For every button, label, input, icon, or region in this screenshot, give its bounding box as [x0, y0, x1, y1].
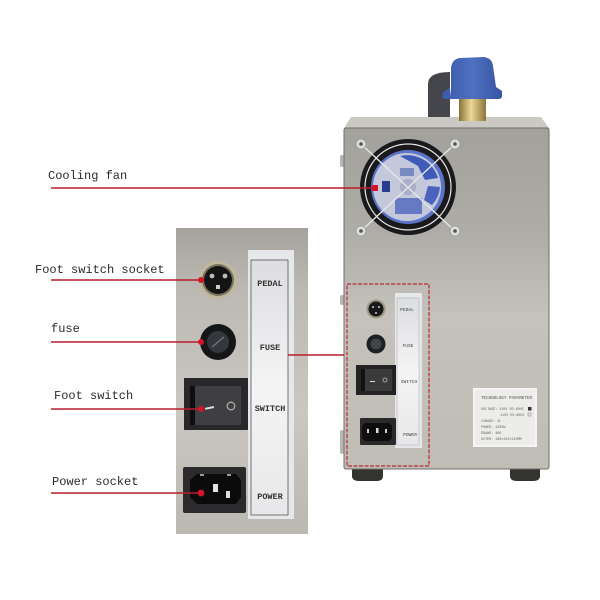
small connector strip: SWITCH — [401, 379, 418, 385]
machine: rear view — [340, 57, 549, 481]
label: foot switch socket: Foot switch socket — [35, 263, 165, 277]
technology parameter label: CUBAGE: 3L — [481, 420, 501, 424]
label: foot switch: Foot switch — [54, 389, 133, 403]
small connector strip: FUSE — [402, 343, 414, 349]
technology parameter label: 110V 50-60HZ — [500, 414, 524, 418]
technology parameter label: VOLTAGE: 220V 50-60HZ — [481, 408, 524, 412]
fuse holder — [200, 324, 236, 360]
small fuse — [366, 334, 386, 354]
fan screws — [356, 139, 460, 236]
small connector strip: PEDAL — [400, 307, 414, 313]
small power socket — [360, 418, 396, 445]
small pedal socket — [366, 300, 386, 318]
small switch — [356, 365, 396, 395]
dashed highlight box — [347, 284, 429, 466]
label strip: SWITCH — [255, 404, 285, 414]
label: cooling fan: Cooling fan — [48, 169, 127, 183]
label: fuse: fuse — [51, 322, 80, 336]
rocker switch — [184, 378, 248, 430]
technology parameter label: OUTER: 160×240×310MM — [481, 437, 522, 442]
technology parameter label — [473, 388, 537, 447]
technology parameter label: DRAWS: 4KG — [481, 432, 501, 436]
callout lines — [51, 185, 378, 496]
brass fitting — [459, 97, 486, 121]
rear feet — [352, 468, 540, 481]
label strip: POWER — [257, 492, 284, 502]
blue knob — [442, 57, 502, 99]
technology parameter label: POWER: 1300W — [481, 426, 506, 430]
top surface — [344, 117, 549, 128]
technology parameter label: TECHNOLOGY PARAMETER — [481, 396, 532, 401]
foot switch socket — [199, 261, 237, 299]
power socket — [183, 467, 246, 513]
label strip: FUSE — [260, 343, 280, 353]
steel body — [344, 128, 549, 469]
label strip: PEDAL — [257, 279, 283, 289]
side screws — [340, 155, 344, 454]
label strip — [248, 250, 294, 519]
cooling fan — [356, 139, 460, 236]
elbow pipe — [428, 72, 450, 120]
panel: enlarged connector panel — [176, 228, 308, 534]
small connector strip — [395, 293, 422, 448]
fan guard — [361, 144, 455, 231]
label: power socket: Power socket — [52, 475, 138, 489]
small connector strip: POWER — [403, 432, 417, 438]
